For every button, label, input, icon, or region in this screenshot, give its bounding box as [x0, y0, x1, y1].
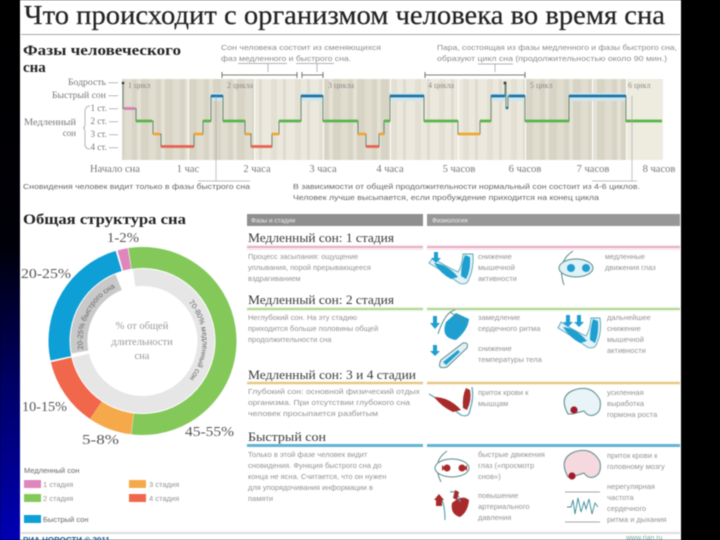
icon: irregular pulse [565, 492, 600, 522]
percentage labels: 45-55% [185, 425, 234, 440]
description: человек просыпается разбитым [248, 409, 378, 418]
text: irregular rhythm: частота [607, 493, 635, 502]
axis labels: Быстрый сон — [52, 90, 119, 100]
text: blood pressure: давления [478, 513, 511, 522]
description: сновидения. Функция быстрого сна до [248, 461, 382, 470]
icon: relaxed arm [429, 252, 473, 284]
description [248, 450, 386, 503]
donut chart: 20-25% быстрого сна [76, 284, 116, 350]
text: growth hormone: гормона роста [607, 410, 658, 419]
footer [21, 532, 680, 540]
axis labels: 4 ст. — [90, 142, 119, 152]
description: приходится больше половины общей [248, 324, 378, 333]
percentage labels: 5-8% [82, 433, 119, 448]
time axis [90, 164, 675, 175]
table header bars: Фазы и стадии [251, 218, 296, 224]
stage segments [124, 96, 662, 146]
text: muscle: активности [478, 274, 517, 283]
text: blood to brain: приток крови к [607, 451, 658, 460]
text: further muscle reduction: дальнейшее [607, 313, 651, 322]
caption: number of cycles: В зависимости от общей продолжительности нормальный сон состоит из 4-6 циклов. [293, 182, 640, 191]
panel: slow sleep stage 1 [247, 230, 680, 285]
panel: slow sleep stage 2 [247, 292, 680, 368]
percentage labels: 1-2% [107, 231, 139, 246]
text: further muscle reduction [607, 313, 651, 355]
cycle labels [128, 81, 650, 90]
panel: slow sleep stage 1: Медленный сон: 1 стадия [248, 230, 394, 245]
panel: sleep phases [23, 43, 677, 202]
percentage labels: 10-15% [22, 400, 67, 415]
text: blood to muscles: мышцам [478, 399, 508, 408]
time axis: 7 часов [577, 164, 609, 175]
time axis: Начало сна [90, 164, 140, 175]
annotation: cycle definition [425, 43, 677, 78]
legend: 2 стадия [43, 494, 73, 503]
description: конца не ясна. Считается, что он нужен [248, 472, 386, 481]
description: продолжительности сна [248, 335, 332, 344]
text: further muscle reduction: мышечной [607, 335, 644, 344]
time axis: 8 часов [643, 164, 675, 175]
panel: slow sleep stages 3 and 4 [247, 367, 680, 419]
text: growth hormone: усиленная [607, 388, 644, 397]
axis labels: сон [63, 128, 76, 138]
caption: number of cycles [293, 182, 640, 202]
axis labels: 2 ст. — [90, 116, 119, 126]
cycle labels: 5 цикл [530, 81, 552, 90]
inner ring labels [172, 302, 203, 393]
annotation: sleep alternation: Сон человека состоит из сменяющихся [221, 43, 381, 52]
legend: 3 стадия [149, 480, 179, 489]
description: Только в этой фазе человек видит [248, 450, 368, 459]
text: heart: замедление [478, 313, 520, 322]
text: blood to brain: головному мозгу [607, 462, 665, 471]
axis labels [24, 77, 119, 152]
text: irregular rhythm: ритма и дыхания [607, 515, 666, 524]
heading: sleep phases: сна [23, 60, 46, 76]
text: blood pressure [478, 491, 530, 522]
axis labels: Медленный [24, 117, 76, 127]
left gradient border [0, 0, 20, 540]
text: blood pressure: повышение [478, 491, 518, 500]
cycle labels: 2 цикла [227, 81, 253, 90]
pointer lines [198, 96, 637, 181]
caption: dreams: Сновидения человек видит только в фазы быстрого сна [23, 182, 251, 191]
heading: sleep phases [23, 43, 181, 76]
description: Процесс засыпания: ощущение [248, 252, 358, 261]
text: fast eye movement: быстрые движения [478, 450, 545, 459]
text: temperature: снижение [478, 344, 512, 353]
description: памяти [248, 494, 273, 503]
axis labels: 3 ст. — [90, 129, 119, 139]
center label: длительности [111, 337, 173, 348]
icon: slow eye [559, 251, 593, 285]
text: eyes [605, 252, 656, 272]
heading: sleep phases: Фазы человеческого [23, 43, 181, 59]
description: Неглубокий сон. На эту стадию [248, 313, 357, 322]
icon: slowing heart [430, 310, 469, 340]
axis labels: 1 ст. — [90, 103, 119, 113]
right dark border [681, 0, 720, 540]
text: irregular rhythm [607, 482, 666, 524]
legend: 1 стадия [43, 480, 73, 489]
legend: Медленный сон [24, 466, 79, 475]
axis labels: Бодрость — [68, 77, 119, 87]
light blue REM highlights [211, 93, 626, 101]
text: further muscle reduction: снижение [607, 324, 641, 333]
cycle labels: 1 цикл [128, 81, 150, 90]
cycle labels: 4 цикла [428, 81, 454, 90]
panel: REM sleep [247, 429, 680, 524]
description: организма. При отсутствии глубокого сна [248, 398, 411, 407]
icon: red heart [434, 490, 469, 520]
text: blood pressure: артериального [478, 502, 530, 511]
text: fast eye movement [478, 450, 545, 481]
time axis: 5 часов [443, 164, 475, 175]
text: further muscle reduction: активности [607, 346, 646, 355]
annotation: sleep alternation [221, 43, 381, 78]
text: muscle: мышечной [478, 263, 515, 272]
text: eyes: движения глаз [605, 263, 656, 272]
center label [111, 321, 173, 362]
text: fast eye movement: глаз («просмотр [478, 461, 534, 470]
text: growth hormone: выработка [607, 399, 645, 408]
center label: % от общей [116, 321, 169, 332]
description: уплывания, порой прерывающееся [248, 263, 371, 272]
table header bars: Физиология [432, 218, 468, 224]
text: heart: сердечного ритма [478, 324, 541, 333]
text: blood to muscles: приток крови к [478, 388, 529, 397]
panel: slow sleep stage 2: Медленный сон: 2 стадия [248, 292, 394, 307]
text: blood to brain [607, 451, 665, 471]
time axis: 4 часа [376, 164, 404, 175]
icon: pink brain [564, 450, 600, 480]
table header bars [247, 214, 680, 226]
text: heart [478, 313, 541, 333]
annotation: cycle definition: Пара, состоящая из фазы медленного и фазы быстрого сна, [437, 43, 677, 52]
text: growth hormone [607, 388, 658, 419]
hypnogram chart [122, 79, 663, 160]
text: fast eye movement: снов») [478, 472, 501, 481]
center label: сна [135, 351, 150, 362]
caption: number of cycles: Человек лучше высыпается, если пробуждение приходится на конец цикла [293, 193, 600, 202]
time axis: 2 часа [243, 164, 271, 175]
icon: fast eye [435, 451, 469, 482]
panel: slow sleep stages 3 and 4: Медленный сон: 3 и 4 стадии [248, 367, 416, 382]
title: Что происходит с организмом человека во время сна [24, 0, 665, 30]
legend: Быстрый сон [43, 515, 88, 524]
time axis: 3 часа [309, 164, 337, 175]
text: temperature [478, 344, 543, 364]
text: temperature: температуры тела [478, 355, 543, 364]
time axis: 6 часов [509, 164, 541, 175]
description [248, 387, 420, 418]
text: eyes: медленные [605, 252, 645, 261]
donut chart: 70-80% медленный сон [189, 299, 208, 381]
percentage labels: 20-25% [21, 267, 71, 282]
description: Глубокий сон: основной физический отдых [248, 387, 420, 396]
description: для упорядочивания информации в [248, 483, 373, 492]
icon: arm with arrows [558, 315, 601, 348]
text: blood to muscles [478, 388, 529, 408]
panel: overall sleep structure [21, 212, 238, 524]
icon: red arm [429, 387, 473, 416]
icon: thermometer [430, 343, 468, 368]
icon: brain with gland [564, 388, 600, 416]
annotation: sleep alternation: фаз медленного и быстрого сна. [221, 54, 351, 63]
text: muscle: снижение [478, 252, 512, 261]
stage connector line [123, 83, 662, 146]
description: вздрагиванием [248, 274, 301, 283]
donut chart [48, 246, 238, 436]
description [248, 313, 378, 344]
annotation: cycle definition: образуют цикл сна (продолжительностью около 90 мин.) [437, 54, 667, 63]
panel: REM sleep: Быстрый сон [248, 429, 326, 444]
text: irregular rhythm: сердечного [607, 504, 646, 513]
text: muscle [478, 252, 517, 283]
time axis: 1 час [177, 164, 200, 175]
cycle labels: 6 цикл [628, 81, 650, 90]
legend [24, 466, 179, 524]
legend: 4 стадия [149, 494, 179, 503]
description [248, 252, 371, 283]
cycle labels: 3 цикла [328, 81, 354, 90]
heading: overall structure: Общая структура сна [23, 212, 187, 228]
percentage labels [21, 231, 234, 448]
text: irregular rhythm: нерегулярная [607, 482, 655, 491]
